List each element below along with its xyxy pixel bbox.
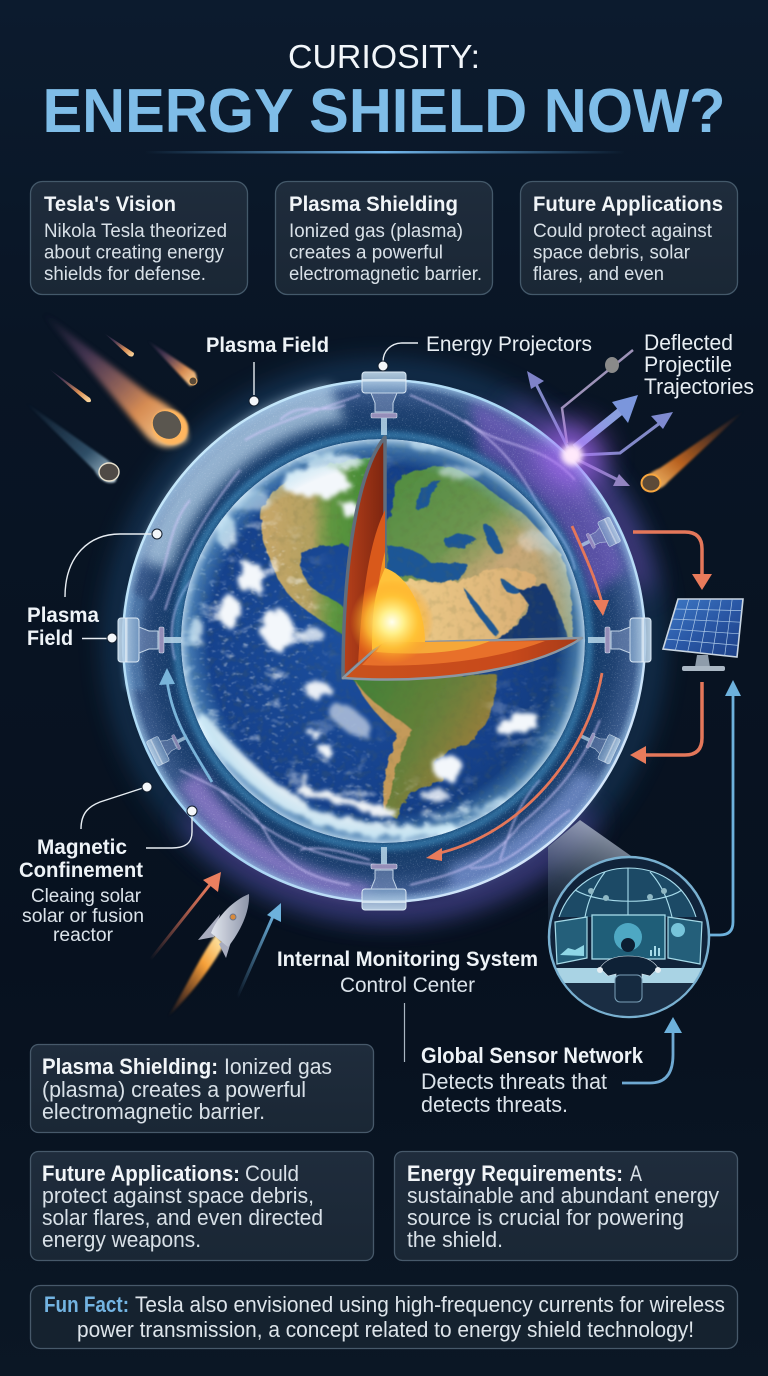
card: Tesla's Vision: Tesla's Vision <box>44 193 176 216</box>
panel: bottom info cards <box>30 1044 738 1348</box>
label: Magnetic Confinement: Magnetic <box>37 836 127 859</box>
arrowheads <box>527 371 673 486</box>
operator and chair <box>597 938 661 1002</box>
Red Sea <box>463 587 499 636</box>
desk <box>556 968 702 983</box>
Andes strip <box>355 680 412 812</box>
label: Internal Monitoring System: Control Center <box>340 974 475 997</box>
icon: solar panel <box>663 599 743 671</box>
label: Energy Projectors <box>378 333 592 371</box>
meteors <box>25 312 745 492</box>
arc arrow: left blue <box>159 668 212 782</box>
arrow: blue rocket side <box>237 903 281 998</box>
card: Plasma Shielding detail: Plasma Shielding: <box>42 1054 218 1079</box>
card: Future Applications detail: protect against space debris, <box>42 1183 314 1208</box>
Black Sea <box>445 534 477 548</box>
plasma wisps <box>150 395 600 885</box>
southern cloud swirl <box>200 722 510 832</box>
monitors <box>555 915 702 964</box>
energy projectors <box>118 372 651 910</box>
control center cone <box>548 820 634 937</box>
small blue meteor <box>25 402 119 483</box>
labels and leader lines <box>19 330 754 1117</box>
card: Plasma Shielding: creates a powerful <box>289 242 443 264</box>
label: Magnetic Confinement: Cleaing solar <box>31 886 142 907</box>
label: Deflected Projectile Trajectories: Deflected <box>644 330 733 355</box>
title line: curiosity: CURIOSITY: <box>288 38 480 75</box>
small meteor: middle <box>48 368 91 402</box>
label: Deflected Projectile Trajectories: Trajectories <box>644 374 754 399</box>
card: Plasma Shielding detail: (plasma) creates a powerful <box>42 1077 306 1102</box>
projector: lower left <box>146 725 193 766</box>
card: Future Applications detail: Could <box>245 1161 299 1186</box>
label: Energy Projectors: Energy Projectors <box>426 333 592 356</box>
small meteor: tiny <box>104 333 134 357</box>
card: Future Applications detail: energy weapons. <box>42 1227 201 1252</box>
label: Plasma Field top <box>206 334 329 406</box>
South America <box>350 675 497 818</box>
label: Global Sensor Network: detects threats. <box>421 1092 568 1117</box>
arc arrow: lower right <box>426 673 602 861</box>
label: Internal Monitoring System: Internal Monitoring System <box>277 947 538 971</box>
right meteor <box>642 410 745 492</box>
card: Plasma Shielding detail <box>30 1044 374 1132</box>
label: Plasma Field top: Plasma Field <box>206 334 329 357</box>
card: Tesla's Vision <box>30 182 248 294</box>
projector: top <box>362 372 406 435</box>
outer glow <box>116 373 652 909</box>
projector: right <box>588 618 651 662</box>
ring colour zones <box>122 385 625 898</box>
label: Global Sensor Network: Detects threats that <box>421 1069 608 1094</box>
label: Internal Monitoring System <box>277 947 538 997</box>
card: Energy Requirements: sustainable and abundant energy <box>407 1183 719 1208</box>
Persian Gulf <box>500 578 522 594</box>
ocean <box>181 439 585 843</box>
Sahara and Arabia <box>403 568 536 641</box>
clouds <box>189 440 562 802</box>
earth cutaway wedge <box>343 437 582 679</box>
card: Plasma Shielding detail: Ionized gas <box>224 1054 332 1079</box>
card: Energy Requirements: source is crucial for powering <box>407 1205 684 1230</box>
left face mantle <box>358 510 385 665</box>
left face <box>343 437 385 678</box>
label: Magnetic Confinement: Confinement <box>19 859 143 882</box>
molten core <box>372 568 425 650</box>
Baltic <box>415 480 440 510</box>
shield rim <box>123 380 645 902</box>
card: Plasma Shielding detail: electromagnetic barrier. <box>42 1099 265 1124</box>
land texture <box>199 462 560 818</box>
card: Future Applications: Could protect against <box>533 221 713 242</box>
card: Tesla's Vision: Nikola Tesla theorized <box>44 221 227 242</box>
card: Future Applications detail: Future Applications: <box>42 1161 240 1186</box>
bottom face outer core <box>376 640 490 654</box>
projector: upper right <box>574 517 621 558</box>
label: Magnetic Confinement <box>19 782 197 946</box>
label: Plasma Field left: Plasma <box>27 604 99 627</box>
card: Future Applications detail: solar flares, and even directed <box>42 1205 323 1230</box>
arc arrow: upper right <box>572 526 609 616</box>
card: Plasma Shielding: Plasma Shielding <box>289 193 458 216</box>
panel: top info cards <box>30 182 738 294</box>
shield ring <box>122 379 646 903</box>
arrow: orange rocket side <box>150 872 221 960</box>
callout: fun fact: power transmission, a concept related to energy shield technology! <box>77 1317 694 1342</box>
label: Plasma Field left <box>27 529 162 650</box>
large fiery meteor <box>42 312 195 452</box>
deflected rock <box>605 357 619 373</box>
callout: fun fact: Tesla also envisioned using high-frequency currents for wireless <box>135 1292 725 1317</box>
card: Energy Requirements: Energy Requirements: <box>407 1161 623 1186</box>
label: Global Sensor Network <box>421 1043 644 1117</box>
callout: fun fact: Fun Fact: <box>44 1292 129 1317</box>
card: Future Applications <box>520 182 738 294</box>
deflection arrows <box>535 350 664 482</box>
icon: control center <box>548 856 710 1018</box>
label: Global Sensor Network: Global Sensor Network <box>421 1043 644 1068</box>
label: Deflected Projectile Trajectories: Projectile <box>644 352 732 377</box>
label: Deflected Projectile Trajectories <box>644 330 754 399</box>
title <box>42 38 726 146</box>
streaky cloud noise <box>181 443 560 840</box>
arrow: solar panel to shield <box>630 682 702 764</box>
title line: energy shield now: ENERGY SHIELD NOW? <box>42 77 726 146</box>
projector: left <box>118 618 181 662</box>
arrow: control center to solar panel <box>709 680 741 935</box>
card: Future Applications detail <box>30 1152 374 1260</box>
Arabian Sea <box>496 584 570 642</box>
dome grid <box>559 868 696 917</box>
North America <box>261 458 378 640</box>
card: Energy Requirements: A <box>630 1161 642 1186</box>
card: Energy Requirements <box>394 1152 738 1260</box>
energy flow arrows <box>150 526 741 1083</box>
impact flash <box>538 421 606 489</box>
core glow <box>350 580 434 664</box>
projector: lower right <box>574 723 621 764</box>
bottom face mantle <box>362 640 545 666</box>
seas <box>387 480 570 642</box>
card: Tesla's Vision: shields for defense. <box>44 264 206 285</box>
deflected trajectories and impact <box>527 350 673 489</box>
earth <box>175 435 595 855</box>
arrow: shield to solar panel <box>633 532 712 590</box>
energy shield sphere <box>116 373 652 909</box>
card: Future Applications: flares, and even <box>533 264 664 285</box>
arrow: sensor network to control center <box>622 1017 682 1083</box>
card: Plasma Shielding: electromagnetic barrier. <box>289 264 482 285</box>
label: Plasma Field left: Field <box>27 627 73 650</box>
continents <box>261 458 573 818</box>
card: Energy Requirements: the shield. <box>407 1227 503 1252</box>
left face outer core <box>372 552 385 652</box>
earth edge atmosphere <box>181 439 585 843</box>
small meteor: top <box>147 340 197 386</box>
icon: rocket <box>167 894 249 1018</box>
card: Future Applications: Future Applications <box>533 193 723 216</box>
label: Magnetic Confinement: solar or fusion <box>22 906 144 927</box>
Mediterranean <box>387 546 468 582</box>
card: Plasma Shielding <box>276 182 492 294</box>
card: Plasma Shielding: Ionized gas (plasma) <box>289 221 463 242</box>
label: Magnetic Confinement: reactor <box>53 925 114 946</box>
bottom face <box>343 638 582 679</box>
Eurasia and Africa land <box>385 466 573 646</box>
callout: fun fact <box>30 1286 738 1348</box>
card: Future Applications: space debris, solar <box>533 242 691 264</box>
projector: bottom <box>362 847 406 910</box>
ring sparkle specks <box>126 383 642 899</box>
earth atmosphere halo <box>177 435 589 847</box>
Caspian <box>484 525 503 554</box>
card: Tesla's Vision: about creating energy <box>44 242 224 264</box>
